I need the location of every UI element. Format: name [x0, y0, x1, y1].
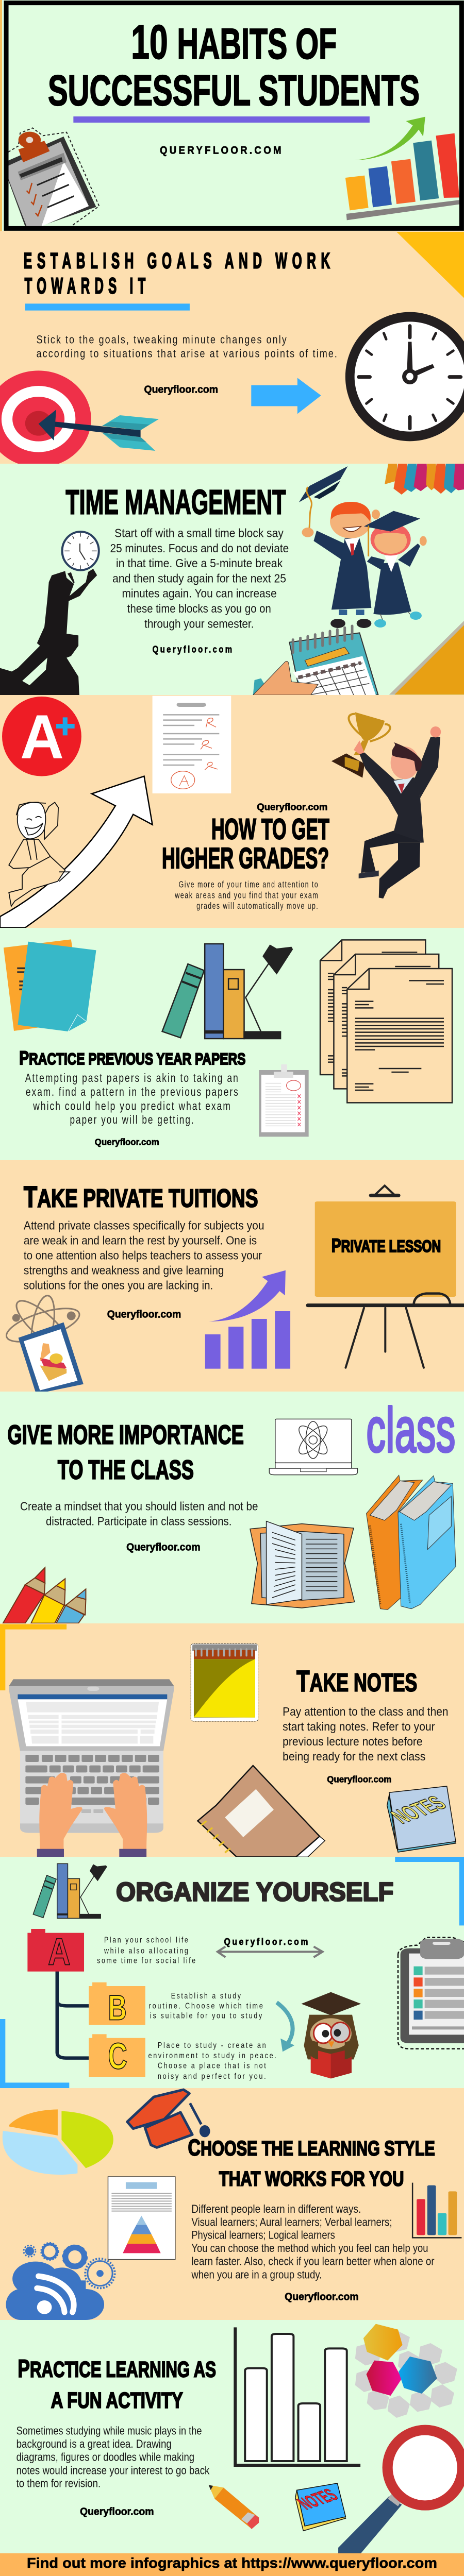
icon: graduation cap — [127, 2090, 210, 2147]
panel: practice learning as a fun activity — [0, 2320, 464, 2555]
text: step A — [97, 1935, 197, 1965]
panel: time management — [0, 464, 464, 696]
body text: 25 minutes. Focus and do not deviate — [110, 541, 289, 555]
heading: A FUN ACTIVITY — [51, 2388, 183, 2413]
panel: title header — [0, 0, 464, 232]
icon: A plus badge — [2, 697, 81, 776]
icon: climbing silhouette — [0, 569, 97, 695]
folder C — [89, 2034, 145, 2077]
site link: Queryfloor.com — [95, 1138, 159, 1147]
folder B — [89, 1982, 145, 2028]
heading — [162, 812, 329, 874]
body text: Start off with a small time block say — [114, 527, 284, 540]
icon: calendar in hand — [253, 626, 378, 695]
icon: target with dart — [0, 370, 159, 467]
illustration: graduate boy — [302, 502, 380, 628]
panel: establish goals — [0, 232, 464, 467]
arrow: big upward arrow — [0, 776, 153, 928]
blue corner brackets — [0, 1857, 464, 2088]
body text: distracted. Participate in class sessions. — [46, 1515, 231, 1528]
corner triangle — [389, 621, 464, 694]
corner triangle — [396, 232, 464, 298]
arrow: double headed — [218, 1946, 323, 1957]
site link: Queryfloor.com — [126, 1541, 201, 1553]
site name: QUERYFLOOR.COM — [160, 144, 284, 156]
icon: standing books — [367, 1475, 456, 1609]
icon: coloured pencils — [3, 1568, 86, 1623]
site link: Queryfloor.com — [144, 384, 218, 395]
pie chart — [3, 2109, 113, 2175]
site link: Queryfloor.com — [224, 1937, 310, 1947]
panel: organize yourself: is suitable for you to study — [150, 2011, 263, 2020]
site link: Queryfloor.com — [107, 1309, 181, 1320]
folder A: A — [48, 1930, 71, 1973]
icon: A plus badge: A — [20, 702, 64, 772]
graded test paper — [153, 696, 231, 793]
site link: Queryfloor.com — [327, 1774, 391, 1785]
site link: Queryfloor.com — [257, 802, 327, 812]
panel: organize yourself: environment to study in peace. — [148, 2051, 277, 2060]
heading — [18, 2354, 216, 2413]
icon: rising bar chart — [345, 117, 459, 220]
illustration: businessman with trophy — [332, 712, 441, 899]
panel: organize yourself: some time for social life — [97, 1956, 197, 1965]
heading — [24, 248, 335, 298]
body text — [175, 879, 319, 911]
panel: organize yourself: while also allocating — [104, 1946, 189, 1955]
icon: clipboard — [8, 128, 99, 226]
body text — [110, 527, 289, 630]
footer banner — [0, 2553, 464, 2576]
panel: learning style — [0, 2088, 464, 2321]
panel: practice learning as a fun activity: PRACTICE LEARNING AS — [18, 2354, 216, 2382]
body text: minutes again. You can increase — [122, 587, 277, 600]
body text: in that time. Give a 5-minute break — [116, 556, 283, 570]
body text: through your semester. — [144, 617, 254, 630]
panel: organize yourself: routine. Choose which time — [149, 2001, 264, 2010]
icon: checklist clipboard — [398, 1938, 464, 2049]
panel: time management: Queryfloor.com — [153, 645, 234, 655]
body text: Attend private classes specifically for subjects you — [24, 1219, 264, 1232]
panel: practice learning as a fun activity: notes would increase your interest to go back — [16, 2464, 210, 2477]
mini bar chart — [412, 2183, 461, 2238]
panel: organize yourself: Choose a place that is not — [158, 2061, 267, 2070]
arrow: curved teal — [277, 2003, 294, 2052]
icon: gears and cloud — [6, 2243, 115, 2321]
body text — [24, 1219, 264, 1292]
body text: these time blocks as you go on — [127, 602, 271, 615]
body text: diagrams, figures or doodles while making — [16, 2451, 194, 2464]
body text — [283, 1705, 449, 1763]
body text: when you are in a group study. — [191, 2268, 322, 2281]
heading: TO THE CLASS — [58, 1455, 194, 1485]
body text: are weak in and learn the rest by yourself. One is — [24, 1234, 257, 1247]
panel: practice previous year papers — [0, 928, 464, 1160]
folder C: C — [108, 2036, 127, 2077]
heading — [7, 1420, 244, 1485]
text: step C — [148, 2041, 277, 2081]
body text — [191, 2202, 435, 2281]
illustration: happy cartoon student — [9, 802, 70, 906]
text: step B — [149, 1991, 264, 2020]
body text — [37, 333, 338, 360]
heading — [188, 2135, 435, 2190]
bar chart — [235, 2327, 360, 2465]
body text — [20, 1500, 258, 1528]
corner bracket — [0, 1624, 67, 1690]
panel: organize yourself — [0, 1857, 464, 2088]
text: step C: noisy and perfect for you. — [158, 2072, 267, 2081]
icon: books and lamp — [162, 944, 293, 1039]
illustration: graduate girl — [364, 511, 427, 628]
bar chart with arrow — [205, 1270, 290, 1369]
icon: yellow notepad — [191, 1643, 258, 1721]
icon: coloured sheets — [4, 939, 96, 1031]
icon: stack of documents — [320, 940, 452, 1103]
text: step B: Establish a study — [171, 1991, 242, 2001]
site link: Queryfloor.com — [80, 2506, 154, 2517]
body text — [25, 1071, 239, 1126]
footer banner: Find out more infographics at https://www.queryfloor.com — [27, 2555, 437, 2571]
text: step C: Place to study - create an — [158, 2041, 267, 2050]
panel: private tuitions — [0, 1160, 464, 1393]
icon: wall clock — [345, 312, 464, 441]
icon: laptop with atom — [269, 1419, 357, 1475]
heading underline bar — [25, 303, 190, 311]
folder A — [27, 1929, 84, 1973]
panel: organize yourself: Plan your school life — [104, 1935, 189, 1944]
body text: Create a mindset that you should listen and not be — [20, 1500, 258, 1513]
icon: thrown graduation cap — [299, 466, 347, 529]
panel: higher grades — [0, 695, 464, 928]
icon: brown spiral notebook — [197, 1766, 325, 1857]
title — [48, 15, 420, 114]
illustration: laptop with typing hands — [9, 1679, 174, 1857]
icon: small clock — [62, 532, 99, 570]
icon: owl with book — [301, 1992, 361, 2078]
illustration: easel with private lesson board — [308, 1185, 464, 1368]
tree connector lines — [57, 1970, 89, 2058]
icon: pencil — [209, 2485, 259, 2529]
panel: take notes — [0, 1623, 464, 1857]
icon: books and lamp — [33, 1863, 107, 1918]
heading: TOWARDS IT — [25, 273, 151, 298]
icon: notes book — [385, 1786, 456, 1852]
icon: science tablet — [3, 1294, 84, 1393]
folder B: B — [108, 1989, 127, 2028]
body text: to one attention also helps teachers to assess your — [24, 1249, 262, 1262]
icon: notes book: NOTES — [293, 2485, 342, 2513]
body text: paper you will be getting. — [70, 1113, 195, 1126]
site link: Queryfloor.com — [285, 2291, 359, 2302]
icon: magnifying glass — [338, 2425, 464, 2555]
document with pyramid chart — [108, 2177, 175, 2260]
icon: open book — [250, 1521, 355, 1608]
icon: notes book — [293, 2483, 345, 2531]
body text: to them for revision. — [16, 2477, 101, 2490]
body text: strengths and weakness and give learning — [24, 1264, 224, 1277]
body text: background is a great idea. Drawing — [16, 2437, 172, 2450]
body text: Sometimes studying while music plays in the — [16, 2425, 202, 2437]
body text: solutions for the ones you are lacking in. — [24, 1279, 213, 1292]
arrow — [251, 378, 321, 414]
header frame — [6, 3, 461, 228]
title underline bar — [73, 116, 370, 123]
icon: ribbon banners — [385, 464, 464, 495]
body text — [16, 2425, 210, 2490]
hexagon cluster — [355, 2324, 457, 2418]
panel: importance of class — [0, 1392, 464, 1623]
icon: marked clipboard — [259, 1064, 309, 1137]
body text: and then study again for the next 25 — [112, 572, 286, 585]
